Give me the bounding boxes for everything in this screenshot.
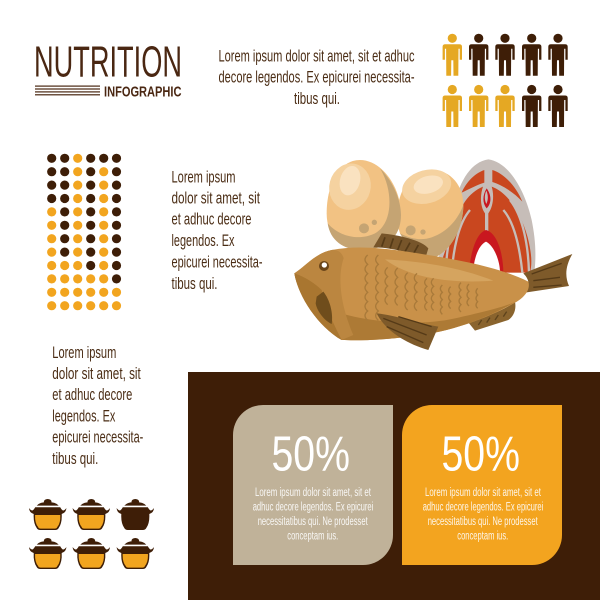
- card text: necessitatibus qui. Ne prodesset: [428, 516, 538, 528]
- text block: lower left: legendos. Ex: [52, 408, 116, 426]
- icon: salmon steak: [439, 159, 535, 273]
- eye: [319, 261, 329, 271]
- card text: [253, 487, 373, 542]
- head shade: [294, 250, 353, 340]
- pictogram: people: [443, 34, 568, 127]
- stat: 50 percent: 50%: [442, 428, 520, 482]
- text block: middle: [172, 169, 262, 293]
- text block: lower left: tibus qui.: [52, 450, 98, 468]
- card text: Lorem ipsum dolor sit amet, sit et: [255, 487, 372, 499]
- text block: top: Lorem ipsum dolor sit amet, sit et adhuc: [218, 48, 414, 66]
- panel: dark background: [188, 372, 600, 600]
- text block: middle: epicurei necessita-: [172, 253, 262, 271]
- text block: middle: tibus qui.: [172, 275, 218, 293]
- icon: left egg: [324, 159, 401, 250]
- card text: necessitatibus qui. Ne prodesset: [258, 516, 368, 528]
- belly fin: [468, 302, 515, 331]
- dot matrix chart: [47, 154, 121, 310]
- text block: lower left: dolor sit amet, sit: [52, 365, 141, 383]
- illustration: fish, eggs and salmon steak: [294, 159, 572, 350]
- pictogram: pots: [29, 499, 154, 569]
- subtitle: INFOGRAPHIC: [104, 84, 182, 101]
- card text: adhuc decore legendos. Ex epicurei: [253, 502, 373, 514]
- text block: middle: dolor sit amet, sit: [172, 190, 260, 208]
- title: [34, 38, 182, 101]
- title: NUTRITION: [34, 38, 182, 87]
- text block: middle: Lorem ipsum: [172, 169, 236, 187]
- tail fin: [523, 254, 572, 293]
- text block: top: decore legendos. Ex epicurei necessita-: [218, 69, 414, 87]
- scales: [365, 255, 478, 320]
- dorsal fin: [373, 233, 428, 259]
- pectoral fin: [377, 313, 438, 350]
- text block: top: tibus qui.: [294, 90, 340, 108]
- text block: lower left: epicurei necessita-: [52, 429, 143, 447]
- card text: Lorem ipsum dolor sit amet, sit et: [425, 487, 542, 499]
- text block: lower left: [52, 344, 143, 468]
- text block: lower left: et adhuc decore: [52, 386, 132, 404]
- text block: middle: legendos. Ex: [172, 232, 235, 250]
- text block: middle: et adhuc decore: [172, 210, 252, 228]
- card text: [423, 487, 543, 542]
- text block: top: [218, 48, 414, 108]
- title underline stripes: [35, 86, 100, 95]
- text block: lower left: Lorem ipsum: [52, 344, 116, 362]
- belly shade: [340, 300, 518, 340]
- card text: conceptam ius.: [457, 530, 508, 542]
- stat: 50 percent: 50%: [272, 428, 350, 482]
- card: orange 50%: [402, 405, 562, 565]
- body: [294, 248, 529, 340]
- icon: right egg: [397, 164, 463, 258]
- back highlight: [385, 259, 493, 281]
- card: grey 50%: [233, 405, 393, 565]
- card text: conceptam ius.: [287, 530, 338, 542]
- icon: fish: [294, 233, 572, 350]
